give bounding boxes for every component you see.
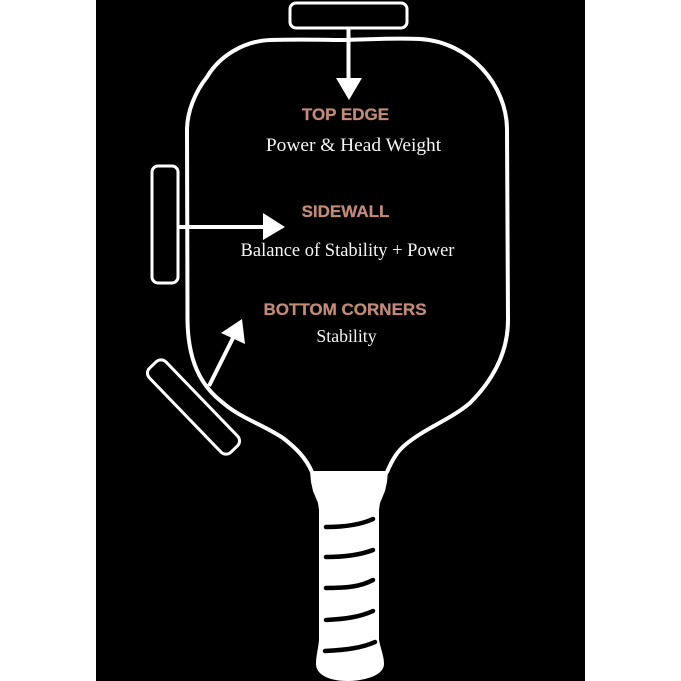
label: top edge bbox=[266, 105, 442, 156]
label: sidewall: SIDEWALL bbox=[302, 202, 389, 221]
black background panel bbox=[96, 0, 585, 681]
paddle face outline bbox=[187, 39, 508, 472]
paddle bbox=[187, 39, 508, 681]
top edge weight tape and arrow bbox=[290, 3, 407, 100]
handle grip lines bbox=[325, 519, 375, 651]
label: top edge: Power & Head Weight bbox=[266, 135, 442, 156]
label: sidewall: Balance of Stability + Power bbox=[241, 241, 454, 261]
label: bottom corners: Stability bbox=[316, 326, 377, 346]
bottom corner weight tape and arrow bbox=[145, 319, 245, 457]
label: bottom corners bbox=[263, 300, 427, 346]
paddle handle bbox=[310, 471, 388, 681]
label: sidewall bbox=[241, 202, 454, 261]
label: top edge: TOP EDGE bbox=[302, 105, 389, 124]
sidewall weight tape and arrow bbox=[152, 166, 285, 283]
label: bottom corners: BOTTOM CORNERS bbox=[263, 300, 427, 319]
